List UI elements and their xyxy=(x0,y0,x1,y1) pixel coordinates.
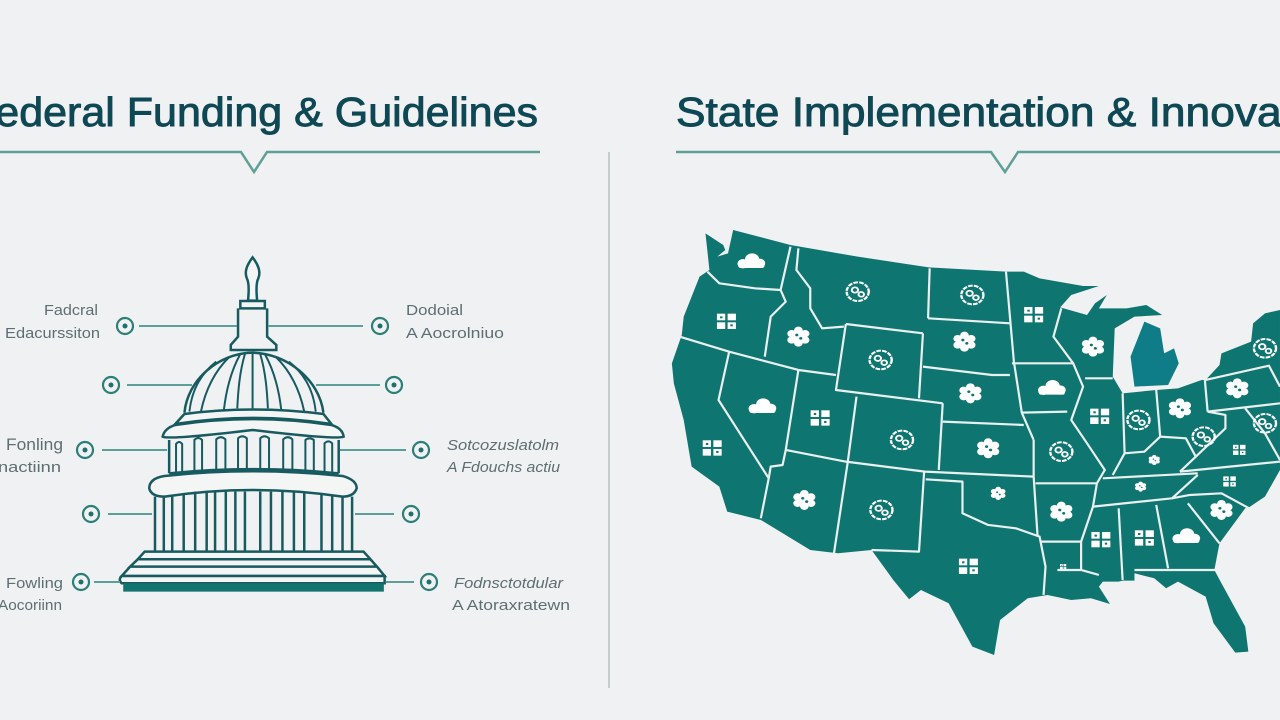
callout labels: left: Edacurssiton xyxy=(5,325,100,342)
lower michigan xyxy=(1131,322,1179,387)
callout labels: right: Sotcozuslatolm xyxy=(447,437,559,454)
state icons xyxy=(703,253,1276,574)
callout labels: left: Fadcral xyxy=(44,302,98,319)
heading underline with pointer: federal xyxy=(0,152,540,172)
heading underline with pointer: state xyxy=(676,152,1280,172)
map landmass xyxy=(672,230,1280,655)
capitol building illustration xyxy=(120,257,385,592)
callout labels: right: A Atoraxratewn xyxy=(452,597,570,614)
callout labels: right: Fodnsctotdular xyxy=(454,575,564,592)
callout labels: left: Fowling xyxy=(6,575,63,592)
callout markers xyxy=(73,318,437,590)
callout labels: right xyxy=(406,302,570,614)
US map of states xyxy=(672,230,1280,655)
center divider xyxy=(608,152,610,688)
callout labels: right: A Fdouchs actiu xyxy=(446,459,561,476)
callout labels: left: Fonling xyxy=(6,435,63,454)
callout labels: left xyxy=(0,302,100,614)
callout labels: right: A Aocrolniuo xyxy=(406,325,504,342)
leader lines xyxy=(94,326,414,582)
state borders xyxy=(680,247,1280,595)
callout labels: right: Dodoial xyxy=(406,302,463,319)
